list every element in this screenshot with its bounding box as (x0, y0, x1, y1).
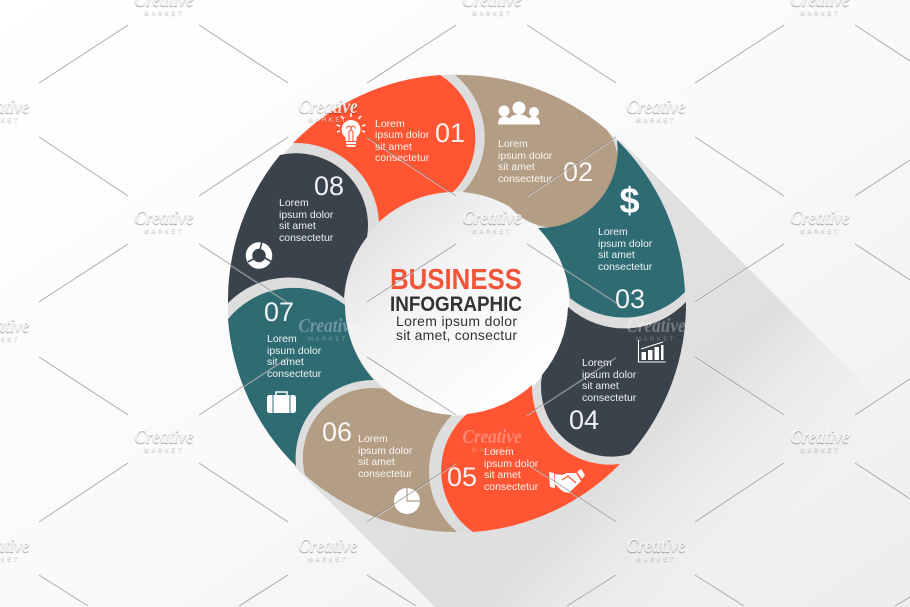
watermarks: Creative (298, 96, 358, 118)
number 08: 08 (314, 171, 344, 201)
number 03: 03 (615, 284, 645, 314)
watermarks: Creative (134, 426, 194, 448)
watermarks: MARKET (144, 448, 184, 454)
number 02: 02 (563, 157, 593, 187)
number 04: 04 (569, 405, 599, 435)
text: 05 description: ipsum dolor (484, 458, 539, 470)
icon: people (498, 102, 540, 124)
text: 03 description: Lorem (598, 226, 628, 238)
watermarks: MARKET (800, 229, 840, 235)
long drop shadow (294, 140, 910, 607)
icon: dollar: $ (619, 180, 640, 221)
text: 01 description: consectetur (375, 152, 430, 164)
text: 04 description: sit amet (582, 380, 619, 392)
segment 05 (441, 385, 620, 532)
watermarks: MARKET (144, 229, 184, 235)
watermarks: MARKET (472, 229, 512, 235)
text: 02 description: ipsum dolor (498, 150, 553, 162)
segment 04 (541, 302, 686, 457)
watermarks: MARKET (144, 11, 184, 17)
text: 02 description: sit amet (498, 161, 535, 173)
watermarks: Creative (298, 535, 358, 557)
text: 08 description: ipsum dolor (279, 209, 334, 221)
segment 02 (455, 75, 619, 228)
text: 05 description: sit amet (484, 469, 521, 481)
segment 01 (293, 75, 475, 222)
icon: handshake (549, 469, 585, 493)
watermarks: Creative (134, 207, 194, 229)
watermarks: MARKET (636, 337, 676, 343)
text: 06 description: sit amet (358, 456, 395, 468)
center title (390, 264, 522, 343)
text: 03 description: sit amet (598, 249, 635, 261)
center disc (345, 192, 569, 416)
icon: cycle arrows (248, 241, 272, 266)
heading: infographic: INFOGRAPHIC (390, 293, 522, 316)
text: 01 description: sit amet (375, 141, 412, 153)
text: 06 description: ipsum dolor (358, 445, 413, 457)
watermarks: Creative (790, 426, 850, 448)
watermarks: MARKET (308, 118, 348, 124)
watermarks: MARKET (636, 118, 676, 124)
watermarks: MARKET (800, 11, 840, 17)
watermarks: MARKET (636, 557, 676, 563)
watermarks: Creative (462, 207, 522, 229)
text: 06 description: Lorem (358, 433, 388, 445)
number 07: 07 (264, 297, 294, 327)
watermarks: Creative (462, 426, 522, 448)
text: 07 description: consectetur (267, 368, 322, 380)
watermarks: Creative (790, 207, 850, 229)
watermarks: MARKET (800, 448, 840, 454)
text: 08 description: consectetur (279, 232, 334, 244)
text: 02 description: consectetur (498, 173, 553, 185)
watermarks: MARKET (308, 557, 348, 563)
text: 08 description: sit amet (279, 220, 316, 232)
watermarks: Creative (626, 535, 686, 557)
text: 04 description: Lorem (582, 357, 612, 369)
text: 01 description: Lorem (375, 118, 405, 130)
text: 01 description: ipsum dolor (375, 129, 430, 141)
icon: light bulb (336, 113, 366, 147)
watermarks: MARKET (472, 11, 512, 17)
text: 08 description: Lorem (279, 197, 309, 209)
text: 03 description: consectetur (598, 261, 653, 273)
number 01: 01 (435, 118, 465, 148)
text: 07 description: Lorem (267, 333, 297, 345)
ring base (286, 133, 628, 474)
subtitle: Lorem ipsum dolor (396, 313, 517, 329)
watermarks: MARKET (308, 337, 348, 343)
text: 07 description: sit amet (267, 356, 304, 368)
text: 02 description: Lorem (498, 138, 528, 150)
icon: pie chart (394, 488, 420, 514)
text: 05 description: consectetur (484, 481, 539, 493)
text: 03 description: ipsum dolor (598, 238, 653, 250)
text: 06 description: consectetur (358, 468, 413, 480)
segment 03 (538, 140, 685, 318)
icon: briefcase (267, 392, 296, 413)
watermarks: Creative (626, 96, 686, 118)
text: 05 description: Lorem (484, 446, 514, 458)
text: 04 description: consectetur (582, 392, 637, 404)
number 06: 06 (322, 417, 352, 447)
segment 07 (228, 288, 374, 466)
icon: bar chart (638, 340, 666, 362)
subtitle: sit amet, consectur (396, 327, 517, 343)
text: 07 description: ipsum dolor (267, 345, 322, 357)
watermarks: Creative (298, 315, 358, 337)
segment 08 (228, 153, 368, 303)
heading: business: BUSINESS (390, 264, 522, 296)
segment 06 (303, 388, 457, 532)
watermarks: MARKET (472, 448, 512, 454)
text: 04 description: ipsum dolor (582, 369, 637, 381)
number 05: 05 (447, 462, 477, 492)
watermarks: Creative (626, 315, 686, 337)
